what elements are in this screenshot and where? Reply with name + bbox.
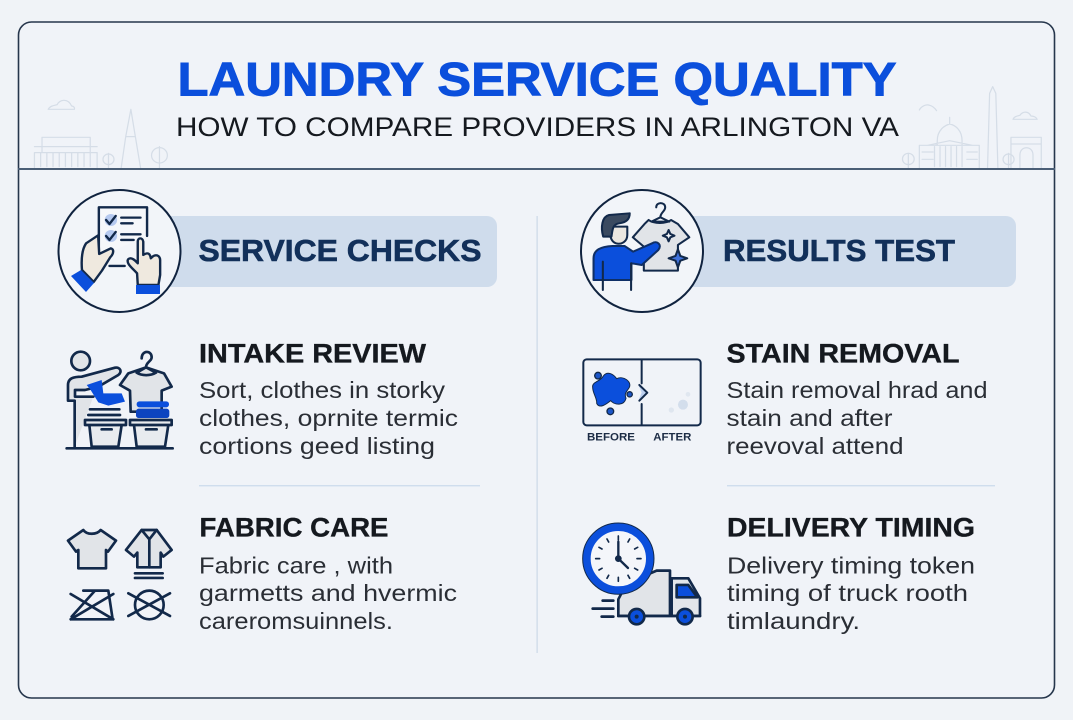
item: stain removal <box>583 338 988 459</box>
body text: cortions geed listing <box>199 433 435 459</box>
icon: checklist and hands <box>58 190 180 312</box>
body text: timlaundry. <box>727 608 860 634</box>
body text: stain and after <box>726 405 893 431</box>
header divider <box>18 168 1055 170</box>
body text <box>726 377 988 459</box>
icon: before and after stain: BEFORE <box>587 432 635 444</box>
icon: sorting clothes into baskets <box>67 352 173 448</box>
title: LAUNDRY SERVICE QUALITY <box>178 54 896 107</box>
heading: FABRIC CARE <box>200 513 388 543</box>
panel: results test <box>581 190 1016 634</box>
heading: DELIVERY TIMING <box>727 513 975 543</box>
item: delivery timing <box>583 513 975 634</box>
skyline left <box>34 100 167 168</box>
skyline right <box>902 87 1041 168</box>
heading pill: results test <box>680 216 1016 287</box>
icon: before and after stain <box>583 359 701 444</box>
body text: Stain removal hrad and <box>726 377 988 403</box>
body text: careromsuinnels. <box>199 608 393 634</box>
body text: clothes, oprnite termic <box>199 405 458 431</box>
column divider <box>536 216 538 653</box>
heading: STAIN REMOVAL <box>726 338 960 368</box>
body text <box>727 552 975 634</box>
panel: service checks <box>58 190 497 634</box>
body text: Fabric care , with <box>199 552 393 578</box>
item: fabric care <box>68 513 457 634</box>
body text: Sort, clothes in storky <box>199 377 445 403</box>
heading pill: results test: RESULTS TEST <box>723 233 955 268</box>
subtitle: HOW TO COMPARE PROVIDERS IN ARLINGTON VA <box>176 112 899 142</box>
item: intake review <box>67 338 458 459</box>
icon: clock and delivery truck <box>583 523 700 624</box>
body text: garmetts and hvermic <box>199 580 457 606</box>
icon: before and after stain: AFTER <box>653 432 691 444</box>
heading pill: service checks: SERVICE CHECKS <box>198 233 482 268</box>
heading pill: service checks <box>160 216 497 287</box>
body text: Delivery timing token <box>727 552 975 578</box>
body text <box>199 552 457 634</box>
body text: reevoval attend <box>726 433 904 459</box>
heading: INTAKE REVIEW <box>199 338 427 368</box>
icon: garment care symbols <box>68 530 172 619</box>
icon: person inspecting shirt <box>581 190 703 312</box>
body text <box>199 377 458 459</box>
body text: timing of truck rooth <box>727 580 968 606</box>
